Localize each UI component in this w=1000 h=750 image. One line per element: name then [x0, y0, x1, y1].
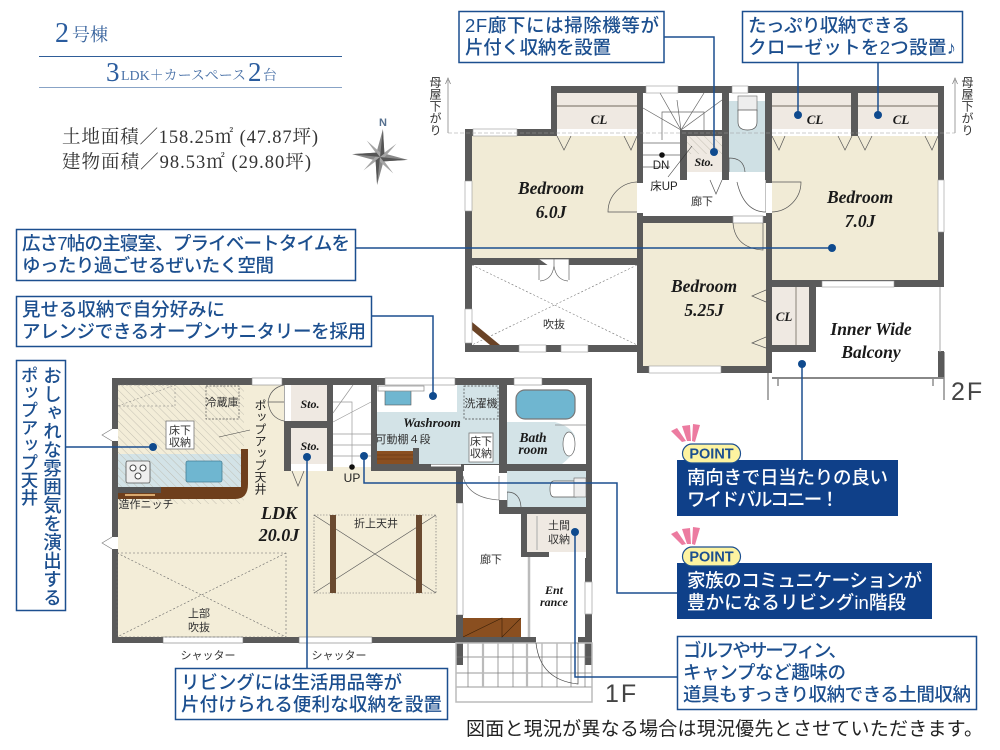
floor plan: second floor: [465, 86, 944, 400]
room: corridor 1F: 廊下: [480, 552, 502, 566]
room: bedroom 5.25J: Bedroom: [670, 276, 737, 296]
room: closet lower: CL: [776, 309, 792, 324]
label: parent roof left: 母屋下がり: [428, 76, 442, 136]
callout: main bedroom: ゆったり過ごせるぜいたく空間: [22, 255, 274, 276]
ceiling: upper void: 吹抜: [188, 620, 210, 634]
room: open void 2F: [472, 259, 637, 345]
icon: compass: [349, 117, 411, 188]
title: layout type: 2: [248, 57, 262, 87]
porch: [456, 643, 592, 702]
dashed parent-roof line: [448, 132, 955, 134]
label: stair direction 2F: 床UP: [650, 180, 678, 193]
doors 2F: [608, 158, 801, 250]
title: building number: 2: [55, 18, 69, 49]
callout: earth-floor storage: キャンプなど趣味の: [683, 662, 846, 683]
ceiling: upper void: [117, 553, 286, 637]
shutter labels: シャッター: [312, 649, 366, 662]
room: bathroom: Bath: [518, 430, 547, 445]
room: storage 2F: [680, 130, 722, 180]
room: bedroom 5.25J: [643, 223, 766, 366]
label: parent roof right: 母屋下がり: [960, 76, 974, 136]
room: closet middle: [772, 93, 851, 136]
callout: main bedroom: [16, 230, 356, 280]
room: closet right: CL: [893, 112, 909, 127]
ceiling: upper void: 上部: [188, 607, 210, 620]
badge: point 2: POINT: [689, 550, 734, 566]
title: building number: [55, 18, 108, 49]
callout: open sanitary: [16, 296, 372, 346]
room: earth-floor storage: 土間: [548, 519, 570, 532]
callout: living storage: リビングには生活用品等が: [181, 672, 402, 693]
room: storage upper: Sto.: [300, 397, 320, 411]
floor plan: first floor: [102, 378, 592, 702]
callout: earth-floor storage: 道具もすっきり収納できる土間収納: [683, 684, 971, 705]
room: bedroom 5.25J: 5.25J: [684, 300, 725, 320]
callout: corridor storage: 片付く収納を設置: [465, 37, 611, 58]
floor label 1F: 1F: [605, 680, 638, 708]
title: layout type: [39, 56, 342, 88]
room: closet left: CL: [591, 112, 607, 127]
callout: open sanitary: アレンジできるオープンサニタリーを採用: [22, 321, 366, 342]
room: LDK: LDK: [260, 503, 299, 523]
label: parent roof left: [428, 76, 450, 136]
room: corridor 2F: [643, 180, 766, 216]
room: toilet 2F: [729, 93, 765, 180]
room: corridor 2F: 廊下: [691, 194, 713, 208]
icon: sink: [186, 461, 222, 482]
leader dots: [149, 111, 882, 536]
room: washroom: 収納: [470, 446, 492, 460]
shutter labels: シャッター: [180, 649, 236, 662]
floor label 2F: 2F: [951, 378, 984, 406]
room: entrance: rance: [540, 595, 569, 609]
panel: stairs message: 家族のコミュニケーションが: [687, 570, 922, 591]
callout: popup ceiling vertical: おしゃれな雰囲気を演出する: [42, 366, 62, 606]
text block: floor areas: [62, 127, 318, 173]
room: entrance: [521, 557, 585, 643]
room: stairs 2F: [643, 93, 722, 180]
ceiling: coved ceiling: 折上天井: [354, 516, 398, 530]
room: entrance: Ent: [544, 583, 564, 597]
title: layout type: LDK＋カースペース: [121, 69, 246, 84]
label: stair direction 2F: [650, 146, 692, 193]
room: washroom: [376, 385, 499, 471]
room: earth-floor storage: [521, 507, 586, 558]
room: storage 2F: Sto.: [694, 155, 714, 169]
room: LDK: 20.0J: [258, 525, 300, 545]
point callout: stairs: [671, 527, 932, 619]
room: washroom: 可動棚４段: [376, 432, 430, 446]
panel: balcony message: [677, 460, 898, 516]
icon: compass: N: [379, 117, 387, 129]
underfloor storage kitchen: 収納: [169, 435, 191, 449]
title: layout type: 台: [263, 68, 277, 84]
room: bedroom 6.0J: [472, 129, 637, 258]
badge: point: [682, 444, 740, 463]
room: bedroom 7.0J: 7.0J: [845, 211, 877, 231]
room: balcony: Balcony: [840, 342, 901, 362]
room: stairs 1F: [333, 385, 371, 485]
callout: main bedroom: 広さ7帖の主寝室、プライベートタイムを: [22, 233, 350, 254]
room: closet right: [858, 93, 938, 136]
room: bedroom 7.0J: Bedroom: [826, 187, 893, 207]
wall mass 1F: [112, 378, 592, 665]
room: bathroom: [507, 385, 586, 464]
corridor wall and windows 1F: [102, 378, 592, 665]
room: storage lower: Sto.: [300, 439, 320, 453]
panel: stairs message: 豊かになるリビングin階段: [687, 592, 906, 613]
ceiling: coved ceiling: [314, 515, 436, 593]
text block: floor areas: 建物面積／98.53㎡ (29.80坪): [62, 152, 311, 173]
callout: two closets: たっぷり収納できる: [748, 15, 910, 36]
callout: corridor storage: [459, 12, 664, 62]
room: bedroom 7.0J: [772, 136, 944, 280]
room: washroom: 洗濯機: [464, 397, 498, 410]
callout: living storage: [176, 668, 448, 720]
room: corridor 1F: [463, 471, 527, 637]
room: open void 2F: 吹抜: [543, 317, 565, 331]
callout: popup ceiling vertical: [16, 360, 66, 610]
callout: two closets: [742, 12, 962, 62]
panel: stairs message: [677, 563, 932, 619]
callout: living storage: 片付けられる便利な収納を設置: [181, 694, 442, 715]
panel: balcony message: 南向きで日当たりの良い: [687, 467, 888, 488]
room: earth-floor storage: 収納: [548, 532, 570, 546]
kitchen zone: [118, 385, 250, 511]
room: washroom: Washroom: [403, 415, 461, 430]
room: storage lower: [268, 385, 327, 486]
room: stairs 1F: UP: [344, 471, 360, 485]
label: popup ceiling: ポップアップ天井: [253, 399, 267, 496]
callout: corridor storage: 2F廊下には掃除機等が: [465, 15, 659, 36]
icon: stove: [126, 461, 150, 483]
kitchen zone: 造作ニッチ: [118, 497, 174, 511]
panel: balcony message: ワイドバルコニー！: [687, 489, 839, 510]
room: bedroom 6.0J: Bedroom: [517, 178, 584, 198]
shutter labels: [180, 649, 366, 662]
text block: floor areas: 土地面積／158.25㎡ (47.87坪): [62, 127, 318, 148]
callout: earth-floor storage: [678, 636, 976, 710]
title: building number: 号棟: [72, 25, 108, 45]
fridge: 冷蔵庫: [206, 395, 238, 409]
wall mass 2F: [465, 86, 944, 373]
callout: earth-floor storage: ゴルフやサーフィン、: [683, 640, 847, 661]
room: washroom: 床下: [470, 435, 492, 448]
room: toilet 1F: [507, 471, 586, 507]
icon: pink rays: [671, 424, 700, 442]
callout: two closets: クローゼットを2つ設置♪: [748, 37, 956, 58]
room: bedroom 6.0J: 6.0J: [536, 202, 568, 222]
room: closet lower: [772, 287, 809, 345]
underfloor storage kitchen: 床下: [169, 424, 191, 437]
callout: open sanitary: 見せる収納で自分好みに: [22, 299, 225, 320]
underfloor storage kitchen: [166, 421, 194, 449]
callout: popup ceiling vertical: ポップアップ天井: [19, 366, 39, 507]
windows 2F: [465, 86, 894, 373]
icon: pink rays 2: [671, 527, 700, 545]
label: stair direction 2F: DN: [653, 160, 669, 172]
room: storage upper: [291, 385, 327, 421]
title: layout type: 3: [106, 57, 120, 87]
room: bathroom: room: [518, 442, 548, 457]
room: balcony: [768, 287, 944, 400]
disclaimer note: 図面と現況が異なる場合は現況優先とさせていただきます。: [466, 718, 983, 740]
leader lines: [66, 37, 878, 677]
badge: point: POINT: [689, 446, 734, 462]
room: closet middle: CL: [807, 112, 823, 127]
label: parent roof right: [952, 76, 974, 136]
point callout: balcony: [671, 424, 898, 516]
room: LDK: [118, 385, 457, 637]
room: closet left: [557, 93, 637, 136]
badge: point 2: [682, 547, 740, 566]
room: balcony: Inner Wide: [829, 319, 912, 339]
